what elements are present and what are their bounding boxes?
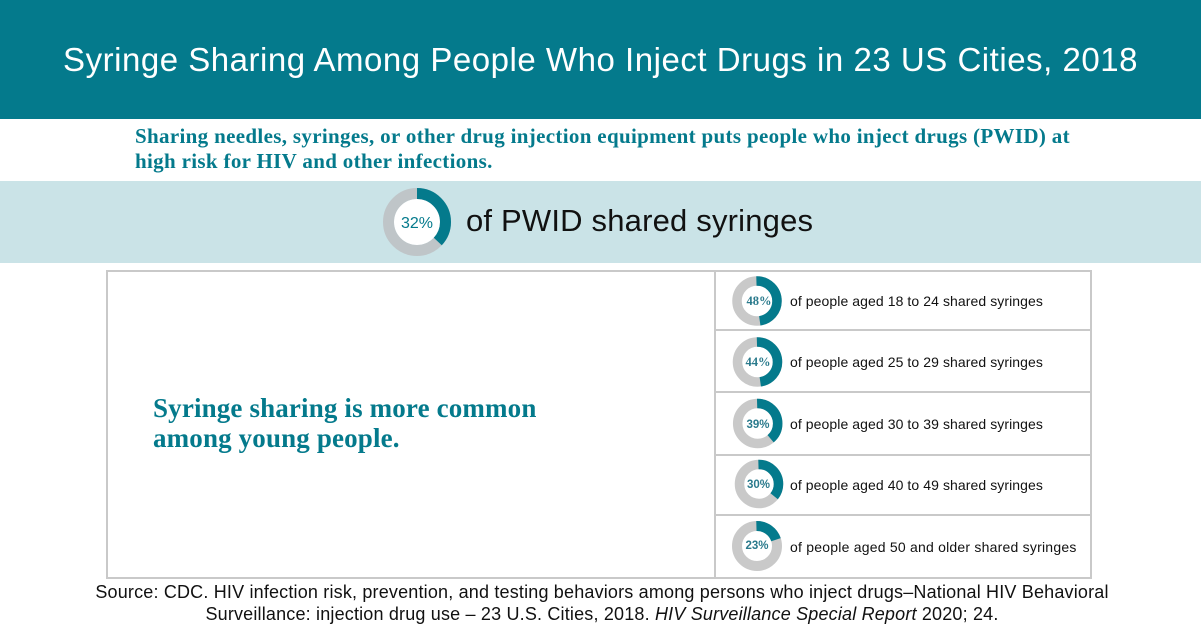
label: of people aged 18 to 24 shared syringes <box>790 293 1043 309</box>
label: of people aged 40 to 49 shared syringes <box>790 477 1043 493</box>
panel heading: among young people. <box>153 422 400 452</box>
age breakdown panel <box>106 270 1092 579</box>
label: of people aged 25 to 29 shared syringes <box>790 354 1043 370</box>
donut: 44% <box>732 337 782 387</box>
label: of people aged 30 to 39 shared syringes <box>790 416 1043 432</box>
row: aged 18 to 24 <box>732 276 1043 326</box>
overall statistic band <box>0 181 1201 263</box>
donut: 39% <box>733 398 782 448</box>
panel heading: Syringe sharing is more common <box>153 393 536 423</box>
row: aged 40 to 49 <box>734 460 1043 508</box>
intro text <box>135 124 1070 173</box>
donut: 23% <box>732 521 782 571</box>
panel heading <box>153 393 536 453</box>
overall donut: 32% <box>383 188 451 256</box>
intro text: Sharing needles, syringes, or other drug injection equipment puts people who inject drugs (PWID) at <box>135 124 1070 148</box>
donut: 44%: 44% <box>746 355 770 369</box>
row: aged 25 to 29 <box>732 337 1043 387</box>
label: of people aged 50 and older shared syringes <box>790 539 1077 555</box>
overall statistic label: of PWID shared syringes <box>466 203 813 238</box>
source note: Source: CDC. HIV infection risk, prevention, and testing behaviors among persons who inject drugs–National HIV Behavioral <box>95 582 1109 602</box>
donut: 39%: 39% <box>746 419 770 431</box>
overall donut: 32%: 32% <box>401 215 433 232</box>
donut: 30% <box>734 460 784 508</box>
donut: 48% <box>732 276 782 326</box>
header banner <box>0 0 1201 119</box>
row: aged 50 and older <box>732 521 1077 571</box>
intro text: high risk for HIV and other infections. <box>135 149 493 173</box>
donut: 30%: 30% <box>747 479 770 491</box>
row: aged 30 to 39 <box>733 398 1043 448</box>
donut: 48%: 48% <box>746 294 772 308</box>
title: Syringe Sharing Among People Who Inject Drugs in 23 US Cities, 2018 <box>63 41 1138 78</box>
source note: Surveillance: injection drug use – 23 U.S. Cities, 2018. HIV Surveillance Special Report 2020; 24. <box>205 604 999 624</box>
source note <box>95 582 1109 624</box>
donut: 23%: 23% <box>745 540 769 552</box>
